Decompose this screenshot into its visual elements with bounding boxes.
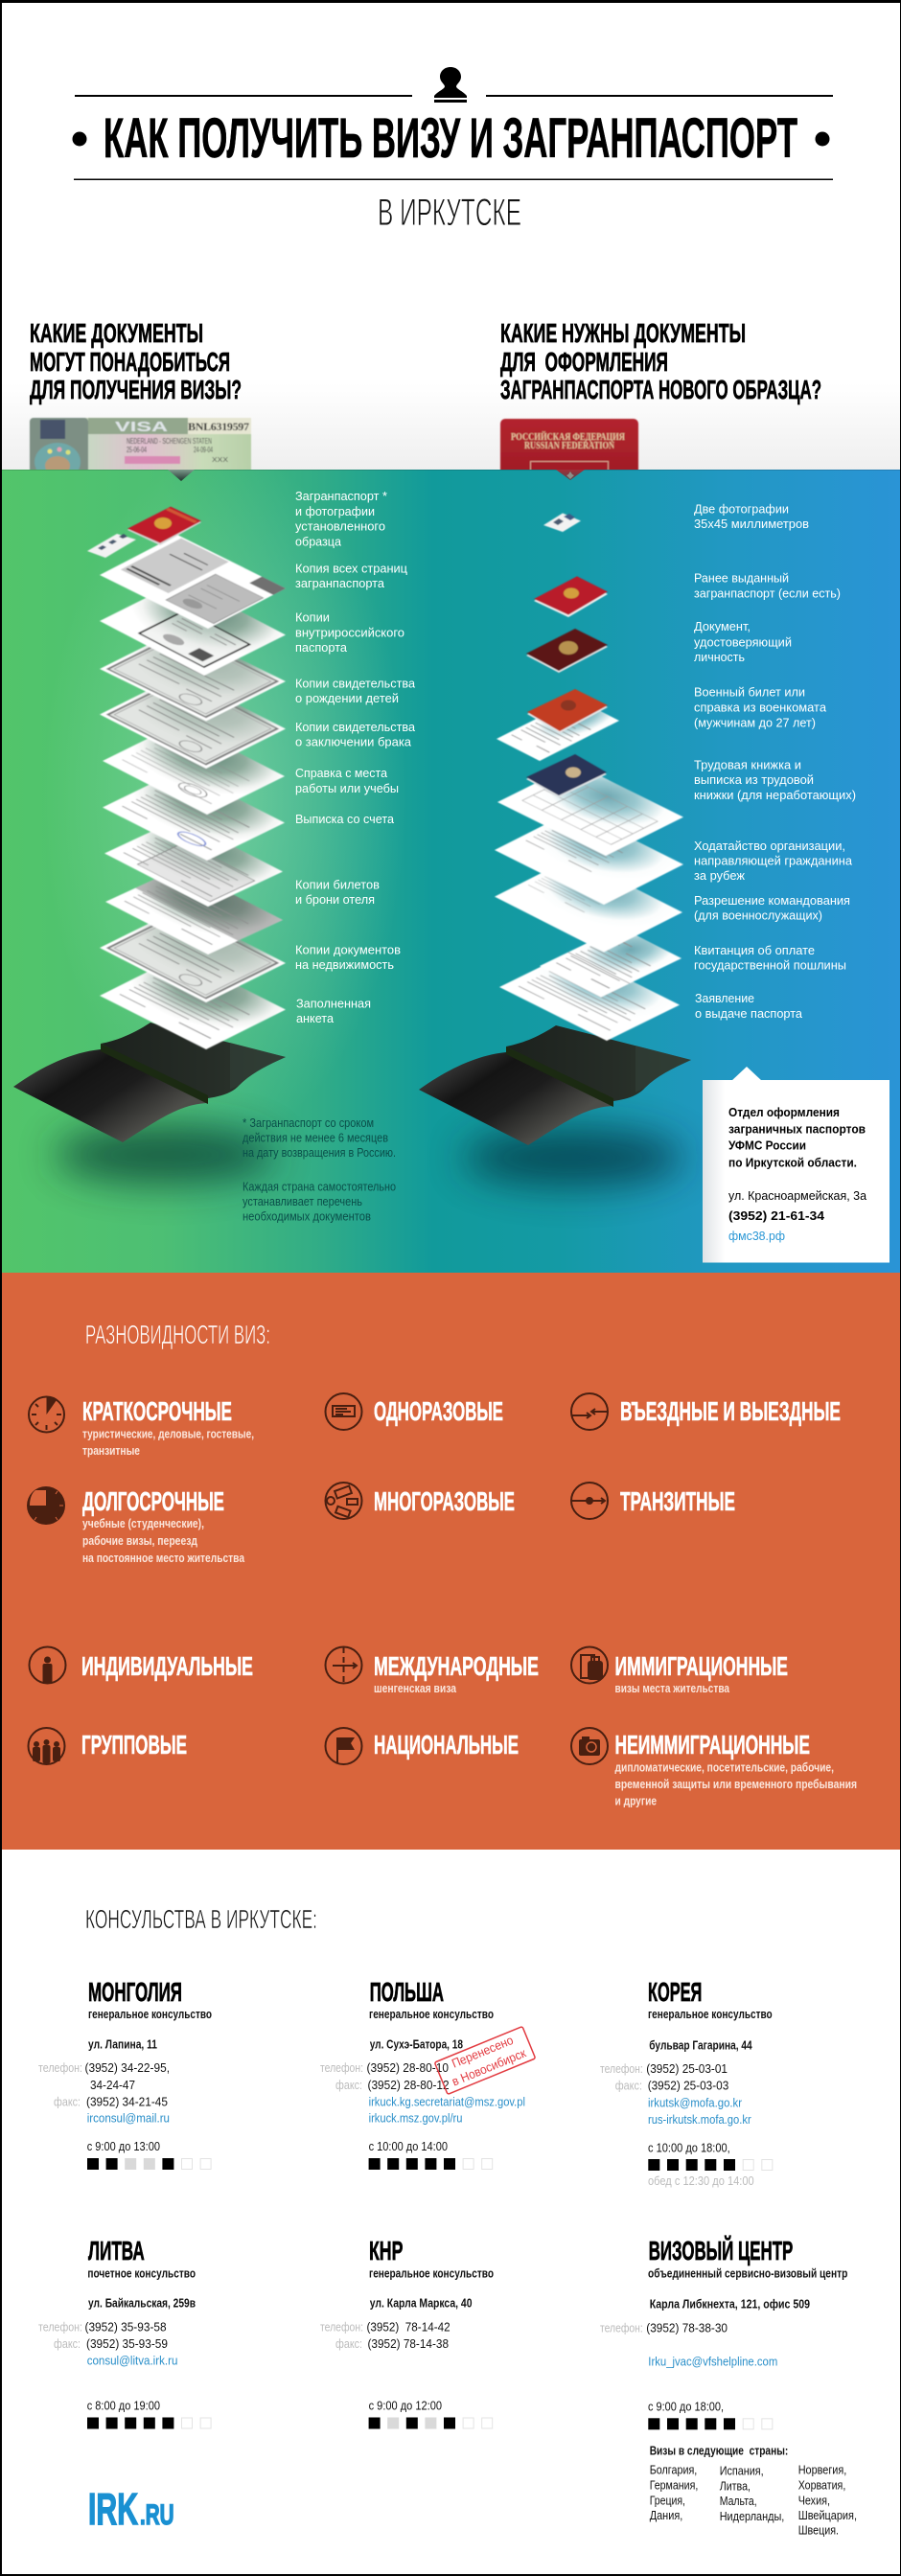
list: passport documents: выписка из трудовой	[694, 773, 814, 787]
icon: transit	[571, 1483, 608, 1519]
list: passport documents: Документ,	[694, 620, 751, 633]
consulate: Lithuania: (3952) 35-93-58	[84, 2319, 167, 2334]
footnote: passport validity	[243, 1116, 396, 1224]
sheet: tickets	[104, 818, 283, 907]
list: passport documents: Военный билет или	[694, 686, 805, 700]
list: passport documents: Заявление	[695, 992, 754, 1005]
list: passport documents: 35х45 миллиметров	[694, 518, 809, 531]
country list: Чехия,	[798, 2493, 830, 2507]
list: visa documents: Заполненная	[296, 997, 371, 1010]
consulate: Korea	[600, 1977, 773, 2188]
consulate: Korea: факс:	[615, 2080, 642, 2093]
schedule squares	[648, 2159, 773, 2171]
footnote: passport validity: Каждая страна самостоятельно	[243, 1181, 396, 1194]
sheet: bank statement	[103, 770, 285, 861]
consulate: China: КНР	[369, 2236, 403, 2266]
consulate: China: с 9:00 до 12:00	[369, 2398, 442, 2412]
consulate: Poland: irkuck.msz.gov.pl/ru	[369, 2112, 463, 2126]
visa type: short-term: туристические, деловые, гостевые,	[82, 1428, 254, 1441]
icon: group	[29, 1728, 65, 1764]
list: passport documents: Две фотографии	[694, 502, 789, 516]
folder: left	[13, 1023, 286, 1142]
sheet: military card extract	[497, 699, 619, 761]
schedule squares	[87, 2158, 211, 2170]
footnote: passport validity: действия не менее 6 месяцев	[243, 1132, 388, 1145]
consulate: China: (3952) 78-14-38	[368, 2336, 449, 2351]
footnote: passport validity: на дату возвращения в Россию.	[243, 1146, 396, 1160]
consulate: Poland: генеральное консульство	[369, 2008, 494, 2021]
list: visa documents: Справка с места	[295, 767, 387, 780]
shadow: left folder	[55, 1126, 275, 1184]
list: passport documents: удостоверяющий	[694, 635, 792, 649]
visa type: immigration: ИММИГРАЦИОННЫЕ	[615, 1651, 788, 1681]
heading: passport documents	[500, 318, 821, 404]
consulate: Lithuania: факс:	[54, 2337, 81, 2351]
visa type: group: ГРУППОВЫЕ	[81, 1730, 187, 1760]
consulate: Visa center: телефон:	[600, 2321, 643, 2334]
list: passport documents: личность	[694, 651, 745, 664]
icon: entry exit arrows	[571, 1393, 608, 1430]
image: passport cover	[500, 419, 638, 481]
sheet: organization petition	[495, 810, 683, 905]
visa type: transit: ТРАНЗИТНЫЕ	[620, 1486, 735, 1516]
folder: right	[419, 1025, 691, 1145]
sheet: application	[499, 952, 680, 1041]
visa type: non-immigration	[615, 1730, 857, 1808]
icon: clock short	[29, 1397, 64, 1432]
consulate: Poland: ул. Сухэ-Батора, 18	[370, 2037, 463, 2051]
pointer: passport	[556, 470, 585, 480]
list: passport documents: Ранее выданный	[694, 571, 789, 585]
visa type: non-immigration: и другие	[615, 1795, 657, 1808]
schedule squares	[369, 2417, 493, 2428]
title block	[73, 67, 833, 234]
heading: visa types: РАЗНОВИДНОСТИ ВИЗ:	[85, 1320, 270, 1349]
country list: Мальта,	[720, 2494, 757, 2508]
image: visa sticker: XXX	[212, 457, 228, 464]
consulate: Korea: бульвар Гагарина, 44	[649, 2038, 752, 2052]
list: visa documents: на недвижимость	[295, 958, 394, 972]
list: passport documents: о выдаче паспорта	[695, 1007, 802, 1021]
icon: clock long	[27, 1486, 65, 1525]
heading: passport documents: КАКИЕ НУЖНЫ ДОКУМЕНТЫ	[500, 318, 746, 348]
visa type: international: МЕЖДУНАРОДНЫЕ	[374, 1651, 539, 1681]
country list: Хорватия,	[798, 2478, 845, 2493]
consulate: Visa center	[600, 2235, 857, 2537]
list: passport documents: (мужчинам до 27 лет)	[694, 716, 816, 729]
icon: flag	[326, 1728, 362, 1764]
callout: passport office: ул. Красноармейская, 3а	[728, 1188, 867, 1203]
consulate: Mongolia: ул. Лапина, 11	[88, 2037, 157, 2051]
schedule squares	[648, 2418, 773, 2429]
country list	[650, 2445, 857, 2537]
country list: Болгария,	[650, 2463, 697, 2477]
country list: Германия,	[650, 2478, 698, 2493]
country list: Визы в следующие страны:	[650, 2445, 788, 2458]
consulate: Poland: irkuck.kg.secretariat@msz.gov.pl	[369, 2095, 525, 2108]
visa type: long-term: рабочие визы, переезд	[82, 1534, 197, 1548]
callout: passport office: фмс38.рф	[728, 1229, 785, 1243]
photos	[87, 534, 136, 558]
sheet: property documents	[100, 908, 286, 1002]
visa type: immigration	[615, 1651, 788, 1695]
consulate: Lithuania: ул. Байкальская, 259в	[88, 2297, 196, 2311]
consulate: China: (3952) 78-14-42	[366, 2319, 450, 2334]
sheet: marriage certificate	[100, 675, 286, 769]
consulate: Korea: rus-irkutsk.mofa.go.kr	[648, 2113, 751, 2127]
country list: Дания,	[650, 2508, 682, 2522]
consulate: Mongolia: генеральное консульство	[88, 2008, 212, 2021]
footnote: passport validity: необходимых документов	[243, 1210, 371, 1224]
list: visa documents: Выписка со счета	[295, 813, 394, 826]
stack: visa documents	[87, 507, 286, 1049]
list: visa documents	[295, 490, 415, 1025]
list: passport documents: справка из военкомата	[694, 701, 826, 714]
visa type: national: НАЦИОНАЛЬНЫЕ	[374, 1730, 519, 1760]
icon: international	[326, 1646, 362, 1684]
sheet: employment certificate	[103, 723, 285, 815]
consulate: Poland: телефон:	[320, 2061, 363, 2075]
consulate: Korea: генеральное консульство	[648, 2008, 773, 2021]
passport: military card	[527, 689, 608, 733]
consulate: Poland: (3952) 28-80-10	[366, 2060, 449, 2075]
consulate: China: ул. Карла Маркса, 40	[370, 2297, 473, 2311]
consulate: Korea: (3952) 25-03-01	[646, 2061, 728, 2076]
list: visa documents: Копии	[295, 611, 330, 625]
icon: stamp	[434, 67, 467, 103]
country list: Нидерланды,	[720, 2509, 784, 2523]
country list: Испания,	[720, 2464, 764, 2478]
schedule squares	[87, 2417, 211, 2428]
visa type: long-term: на постоянное место жительства	[82, 1552, 245, 1565]
heading: visa documents: ДЛЯ ПОЛУЧЕНИЯ ВИЗЫ?	[30, 375, 242, 404]
passport: navy work book	[526, 754, 607, 797]
heading: consulates: КОНСУЛЬСТВА В ИРКУТСКЕ:	[85, 1904, 317, 1934]
stamp: moved to Novosibirsk: Перенесено	[450, 2033, 516, 2071]
list: visa documents: Копии свидетельства	[295, 721, 415, 734]
consulate: Korea: (3952) 25-03-03	[648, 2079, 728, 2093]
consulate: Poland: ПОЛЬША	[370, 1977, 444, 2007]
consulate: Lithuania: с 8:00 до 19:00	[87, 2398, 160, 2412]
panel: documents gradient	[0, 450, 901, 1273]
consulate: Lithuania: consul@litva.irk.ru	[87, 2355, 177, 2368]
list: passport documents: Квитанция об оплате	[694, 944, 815, 957]
image: passport cover: РОССИЙСКАЯ ФЕДЕРАЦИЯ	[511, 431, 625, 443]
consulate: Korea: irkutsk@mofa.go.kr	[648, 2096, 742, 2109]
list: passport documents: направляющей гражданина	[694, 854, 852, 867]
consulate: Visa center: объединенный сервисно-визовый центр	[648, 2266, 848, 2280]
heading: passport documents: ДЛЯ ОФОРМЛЕНИЯ	[500, 347, 668, 377]
image: visa sticker: VISA	[115, 419, 168, 435]
footnote: passport validity: * Загранпаспорт со сроком	[243, 1116, 374, 1130]
consulate: China: телефон:	[320, 2320, 363, 2334]
consulate: Korea: обед с 12:30 до 14:00	[648, 2174, 754, 2188]
country list: Греция,	[650, 2493, 685, 2507]
callout: passport office	[703, 1067, 889, 1263]
list: visa documents: Копия всех страниц	[295, 563, 407, 576]
list: visa documents: и фотографии	[295, 505, 375, 518]
consulate: Mongolia: 34-24-47	[90, 2078, 135, 2092]
list: visa documents: работы или учебы	[295, 782, 399, 795]
image: visa sticker: NEDERLAND - SCHENGEN STATEN	[127, 437, 212, 446]
heading: visa documents	[30, 318, 242, 404]
callout: passport office: заграничных паспортов	[728, 1121, 866, 1137]
subtitle: В ИРКУТСКЕ	[378, 192, 521, 234]
consulate: Poland: факс:	[335, 2079, 362, 2092]
country list: Литва,	[720, 2478, 751, 2493]
schedule squares	[369, 2158, 493, 2170]
visa type: non-immigration: дипломатические, посетительские, рабочие,	[615, 1761, 834, 1775]
list: visa documents: образца	[295, 535, 341, 548]
list: visa documents: паспорта	[295, 641, 347, 655]
consulate: China: генеральное консульство	[369, 2266, 494, 2280]
consulate: Lithuania: (3952) 35-93-59	[86, 2336, 168, 2351]
consulate: Korea: телефон:	[600, 2062, 643, 2076]
list: passport documents: загранпаспорт (если есть)	[694, 586, 841, 600]
visa type: short-term	[82, 1396, 254, 1458]
logo: IRK.RU: .RU	[140, 2499, 174, 2531]
visa type: international	[374, 1651, 539, 1695]
icon: camera	[571, 1728, 608, 1764]
sheet: birth certificate	[100, 629, 286, 721]
passport: red cover	[127, 507, 201, 545]
list: passport documents: книжки (для неработающих)	[694, 789, 856, 802]
consulate: Visa center: Карла Либкнехта, 121, офис 509	[650, 2298, 810, 2312]
sheet: internal passport copy	[100, 581, 286, 676]
image: visa sticker	[30, 418, 251, 481]
photos	[543, 514, 581, 532]
list: visa documents: Копии билетов	[295, 879, 380, 892]
sheet: questionnaire	[100, 956, 286, 1049]
passport: red previously issued	[534, 576, 608, 617]
visa type: long-term: учебные (студенческие),	[82, 1517, 204, 1530]
list: visa documents: и брони отеля	[295, 893, 375, 907]
consulate: Korea: КОРЕЯ	[648, 1977, 702, 2007]
list: passport documents: Трудовая книжка и	[694, 758, 801, 771]
icon: single-entry ticket	[326, 1393, 362, 1430]
consulate: Lithuania: почетное консульство	[87, 2266, 196, 2280]
callout: passport office: по Иркутской области.	[728, 1155, 857, 1169]
visa type: international: шенгенская виза	[374, 1682, 457, 1695]
consulate: Lithuania: ЛИТВА	[88, 2236, 145, 2266]
list: passport documents	[694, 502, 856, 1021]
visa type: short-term: транзитные	[82, 1444, 140, 1458]
consulate: China: факс:	[335, 2337, 362, 2351]
visa type: immigration: визы места жительства	[615, 1682, 730, 1695]
list: visa documents: загранпаспорта	[295, 577, 384, 590]
consulate: Poland: (3952) 28-80-12	[368, 2078, 450, 2092]
consulate: Lithuania: телефон:	[38, 2320, 82, 2334]
panel: visa types	[0, 1273, 901, 1850]
consulate: Poland: с 10:00 до 14:00	[369, 2139, 448, 2153]
list: visa documents: Копии свидетельства	[295, 678, 415, 691]
consulate: Visa center: (3952) 78-38-30	[646, 2320, 728, 2334]
visa type: non-immigration: временной защиты или временного пребывания	[615, 1778, 857, 1791]
list: visa documents: о рождении детей	[295, 692, 399, 705]
visa type: short-term: КРАТКОСРОЧНЫЕ	[82, 1396, 232, 1426]
stamp: moved to Novosibirsk	[434, 2027, 536, 2094]
list: passport documents: Ходатайство организации,	[694, 840, 845, 853]
visa type: individual: ИНДИВИДУАЛЬНЫЕ	[81, 1651, 253, 1681]
list: visa documents: внутрироссийского	[295, 627, 404, 640]
visa type: multi-entry: МНОГОРАЗОВЫЕ	[374, 1486, 515, 1516]
icon: multi-entry tickets	[326, 1483, 362, 1519]
consulate: Mongolia: телефон:	[38, 2061, 82, 2075]
footnote: passport validity: устанавливает перечень	[243, 1195, 362, 1208]
sheet: passport pages copy	[100, 535, 286, 629]
image: visa sticker: 24-09-04	[194, 446, 213, 454]
consulate: Mongolia: (3952) 34-21-45	[86, 2094, 168, 2108]
consulate: Mongolia: (3952) 34-22-95,	[84, 2060, 170, 2075]
visa type: long-term	[82, 1486, 245, 1565]
sheet: military permit	[495, 857, 682, 953]
visa type: single-entry: ОДНОРАЗОВЫЕ	[374, 1396, 503, 1426]
stamp: moved to Novosibirsk: в Новосибирск	[450, 2045, 528, 2089]
consulate: Mongolia: факс:	[54, 2095, 81, 2108]
visa type: long-term: ДОЛГОСРОЧНЫЕ	[82, 1486, 224, 1516]
logo: IRK.RU: IRK	[88, 2484, 138, 2534]
consulate: Mongolia: irconsul@mail.ru	[87, 2112, 170, 2126]
icon: luggage	[571, 1646, 608, 1683]
consulate: Visa center: Irku_jvac@vfshelpline.com	[648, 2356, 777, 2369]
list: passport documents: государственной пошлины	[694, 959, 846, 973]
heading: visa documents: МОГУТ ПОНАДОБИТЬСЯ	[30, 347, 230, 377]
shadow: right folder	[463, 1129, 683, 1186]
country list: Норвегия,	[798, 2463, 846, 2477]
country list: Швеция.	[798, 2522, 839, 2537]
country list: Швейцария,	[798, 2508, 857, 2522]
consulate: Visa center: ВИЗОВЫЙ ЦЕНТР	[649, 2235, 793, 2266]
list: visa documents: о заключении брака	[295, 736, 411, 749]
list: visa documents: Загранпаспорт *	[295, 490, 387, 503]
list: visa documents: анкета	[296, 1012, 334, 1025]
list: passport documents: (для военнослужащих)	[694, 909, 822, 923]
consulate: Mongolia	[38, 1977, 212, 2170]
pointer: visa	[168, 470, 195, 481]
list: visa documents: установленного	[295, 520, 385, 534]
consulate: Lithuania	[38, 2236, 211, 2428]
consulate: Poland	[320, 1977, 525, 2170]
callout: passport office: (3952) 21-61-34	[728, 1208, 825, 1223]
list: passport documents: за рубеж	[694, 869, 746, 883]
callout: passport office: Отдел оформления	[728, 1105, 840, 1119]
image: passport cover: RUSSIAN FEDERATION	[524, 441, 614, 451]
consulate: Mongolia: с 9:00 до 13:00	[87, 2139, 160, 2153]
passport: dark red id	[526, 629, 608, 673]
heading: visa documents: КАКИЕ ДОКУМЕНТЫ	[30, 318, 203, 348]
sheet: hotel booking	[105, 867, 283, 954]
icon: individual	[29, 1646, 65, 1683]
image: visa sticker: 25-06-04	[127, 446, 147, 454]
sheet: work record extract	[497, 764, 683, 856]
consulate: China	[320, 2236, 494, 2428]
consulate: Mongolia: МОНГОЛИЯ	[88, 1977, 182, 2007]
callout: passport office: УФМС России	[728, 1138, 806, 1153]
consulate: Visa center: с 9:00 до 18:00,	[648, 2400, 724, 2414]
image: visa sticker: BNL6319597	[188, 420, 249, 433]
list: passport documents: Разрешение командования	[694, 894, 850, 908]
sheet: receipt	[540, 927, 682, 998]
consulate: Korea: с 10:00 до 18:00,	[648, 2140, 730, 2154]
stack: passport documents	[495, 514, 683, 1041]
list: visa documents: Копии документов	[295, 944, 401, 957]
